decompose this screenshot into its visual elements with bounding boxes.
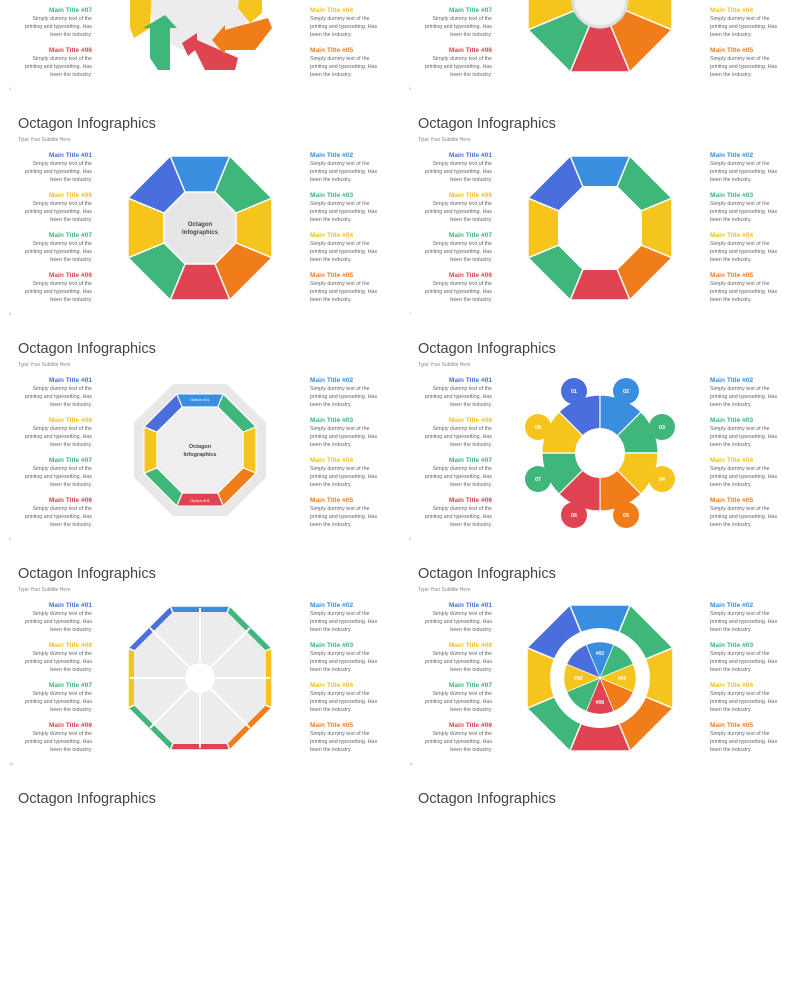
text: right column: Simply dummy text of the xyxy=(310,161,369,167)
text: left column: been the industry. xyxy=(450,667,492,673)
text: left column: Simply dummy text of the xyxy=(33,651,92,657)
subtitle: Type Your Subtitle Here xyxy=(18,587,71,593)
diagram: octagon pinwheel: Octagon xyxy=(188,222,212,228)
slide 10 xyxy=(9,566,377,766)
text: left column: printing and typesetting. Has xyxy=(425,434,492,440)
text: left column: Simply dummy text of the xyxy=(33,386,92,392)
text: right column: Simply dummy text of the xyxy=(710,16,769,22)
text: right column: Main Title #04 xyxy=(310,682,353,689)
text: right column: printing and typesetting. Has xyxy=(710,739,777,745)
slide 7: 7 xyxy=(409,311,411,316)
text: right column: Simply dummy text of the xyxy=(310,611,369,617)
title: Octagon Infographics xyxy=(418,341,556,357)
text: right column: Simply dummy text of the xyxy=(710,651,769,657)
text: right column: Simply dummy text of the xyxy=(710,241,769,247)
slide 10: 10 xyxy=(9,761,13,766)
text: left column: been the industry. xyxy=(450,627,492,633)
text: left column xyxy=(25,377,92,528)
slide 9 xyxy=(409,341,777,541)
subtitle: Type Your Subtitle Here xyxy=(18,362,71,368)
text: right column: printing and typesetting. Has xyxy=(310,289,377,295)
text: left column: been the industry. xyxy=(450,522,492,528)
text: right column: Main Title #03 xyxy=(310,192,353,199)
text: left column: been the industry. xyxy=(50,707,92,713)
text: right column: printing and typesetting. Has xyxy=(710,619,777,625)
text: right column: Simply dummy text of the xyxy=(310,201,369,207)
text: right column: printing and typesetting. Has xyxy=(710,659,777,665)
text: left column: printing and typesetting. Has xyxy=(425,289,492,295)
text: left column: Main Title #08 xyxy=(449,192,492,199)
text: right column: Main Title #02 xyxy=(710,602,753,609)
text: left column: been the industry. xyxy=(450,177,492,183)
text: right column: Main Title #02 xyxy=(710,152,753,159)
subtitle: Type Your Subtitle Here xyxy=(418,137,471,143)
text: right column: been the industry. xyxy=(710,747,752,753)
text: left column: Main Title #07 xyxy=(49,7,92,14)
text: right column: Simply dummy text of the xyxy=(710,201,769,207)
text: left column: printing and typesetting. Has xyxy=(425,699,492,705)
text: left column: been the industry. xyxy=(50,257,92,263)
text: right column: printing and typesetting. Has xyxy=(310,514,377,520)
text: right column: been the industry. xyxy=(710,297,752,303)
slide 4 (top-left, cropped) xyxy=(9,0,377,91)
slide 5 (top-right, cropped): 5 xyxy=(409,86,411,91)
text: right column xyxy=(710,7,777,78)
text: left column: Main Title #06 xyxy=(449,47,492,54)
text: right column: Simply dummy text of the xyxy=(310,241,369,247)
text: left column xyxy=(425,602,492,753)
diagram: octagon pinwheel xyxy=(128,156,272,300)
text: right column: printing and typesetting. Has xyxy=(310,249,377,255)
text: right column: Main Title #02 xyxy=(710,377,753,384)
diagram: petals: 06 xyxy=(571,513,577,519)
text: left column: printing and typesetting. Has xyxy=(425,209,492,215)
text: left column: printing and typesetting. Has xyxy=(425,619,492,625)
title: Octagon Infographics xyxy=(418,116,556,132)
text: left column: printing and typesetting. Has xyxy=(25,619,92,625)
text: right column: been the industry. xyxy=(710,522,752,528)
slide 8: 8 xyxy=(9,536,11,541)
text: left column: printing and typesetting. Has xyxy=(25,289,92,295)
text: right column: printing and typesetting. Has xyxy=(710,24,777,30)
text: left column: Simply dummy text of the xyxy=(33,201,92,207)
text: right column: been the industry. xyxy=(310,482,352,488)
diagram: petals: 08 xyxy=(535,425,541,431)
text: left column: Main Title #08 xyxy=(49,642,92,649)
text: right column: Simply dummy text of the xyxy=(710,161,769,167)
text: right column xyxy=(310,377,377,528)
text: right column: Simply dummy text of the xyxy=(310,56,369,62)
text: left column: Simply dummy text of the xyxy=(433,56,492,62)
diagram: petals xyxy=(525,378,675,528)
text: right column: Simply dummy text of the xyxy=(710,691,769,697)
text: left column: Simply dummy text of the xyxy=(433,16,492,22)
text: left column: been the industry. xyxy=(450,707,492,713)
text: left column: Simply dummy text of the xyxy=(33,731,92,737)
text: left column: been the industry. xyxy=(50,522,92,528)
text: left column: printing and typesetting. Has xyxy=(425,514,492,520)
text: left column: Main Title #07 xyxy=(449,7,492,14)
text: right column xyxy=(310,602,377,753)
text: right column: been the industry. xyxy=(710,707,752,713)
text: left column: printing and typesetting. Has xyxy=(25,249,92,255)
text: left column: been the industry. xyxy=(50,177,92,183)
diagram: option octagon: Option #01 xyxy=(190,498,211,503)
text: left column: been the industry. xyxy=(450,402,492,408)
text: right column: Main Title #03 xyxy=(710,192,753,199)
text: left column: printing and typesetting. Has xyxy=(425,249,492,255)
text: left column: been the industry. xyxy=(50,217,92,223)
subtitle: Type Your Subtitle Here xyxy=(418,362,471,368)
text: right column: been the industry. xyxy=(310,747,352,753)
diagram: octagon pinwheel: Infographics xyxy=(182,230,219,236)
text: left column: printing and typesetting. Has xyxy=(25,434,92,440)
text: left column xyxy=(425,377,492,528)
text: left column: been the industry. xyxy=(50,32,92,38)
text: left column: Simply dummy text of the xyxy=(33,691,92,697)
text: right column: Main Title #05 xyxy=(710,722,753,729)
text: right column: Simply dummy text of the xyxy=(710,281,769,287)
text: left column xyxy=(425,152,492,303)
slide 8 xyxy=(9,341,377,541)
text: right column: printing and typesetting. Has xyxy=(310,434,377,440)
text: left column: Main Title #01 xyxy=(449,602,492,609)
text: right column: printing and typesetting. Has xyxy=(310,739,377,745)
text: right column: Main Title #02 xyxy=(310,602,353,609)
diagram: petals: 04 xyxy=(659,477,666,483)
text: left column: printing and typesetting. Has xyxy=(25,169,92,175)
text: left column: been the industry. xyxy=(50,402,92,408)
diagram: option octagon: Option #01 xyxy=(190,397,211,402)
diagram: octagon ring with pie: #04 xyxy=(618,676,626,682)
text: right column: Main Title #04 xyxy=(710,232,753,239)
text: left column: printing and typesetting. Has xyxy=(25,474,92,480)
text: left column: Simply dummy text of the xyxy=(433,651,492,657)
text: left column: been the industry. xyxy=(50,747,92,753)
text: right column: printing and typesetting. Has xyxy=(710,289,777,295)
text: right column: Main Title #03 xyxy=(710,417,753,424)
text: right column: Simply dummy text of the xyxy=(710,731,769,737)
text: right column: printing and typesetting. Has xyxy=(710,699,777,705)
text: right column: printing and typesetting. Has xyxy=(710,209,777,215)
diagram: petals: 05 xyxy=(623,513,629,519)
text: right column: been the industry. xyxy=(710,217,752,223)
text: left column xyxy=(425,7,492,78)
slide 7 xyxy=(409,116,777,316)
text: right column: Main Title #02 xyxy=(310,377,353,384)
text: left column: Main Title #08 xyxy=(49,417,92,424)
text: right column: printing and typesetting. Has xyxy=(310,64,377,70)
text: right column: Simply dummy text of the xyxy=(310,281,369,287)
text: left column: Simply dummy text of the xyxy=(33,241,92,247)
text: left column: been the industry. xyxy=(50,442,92,448)
diagram: octagon ring with pie xyxy=(528,606,672,750)
text: right column: been the industry. xyxy=(710,667,752,673)
text: right column: Simply dummy text of the xyxy=(310,386,369,392)
diagram: option octagon: Infographics xyxy=(183,452,217,458)
text: right column: been the industry. xyxy=(310,177,352,183)
diagram: octagon ring with pie: #02 xyxy=(596,651,604,657)
text: left column: Main Title #06 xyxy=(449,497,492,504)
text: right column: been the industry. xyxy=(310,257,352,263)
text: right column: Main Title #04 xyxy=(310,232,353,239)
text: right column: Main Title #05 xyxy=(710,497,753,504)
text: left column: been the industry. xyxy=(50,627,92,633)
text: right column: printing and typesetting. Has xyxy=(710,249,777,255)
text: left column: printing and typesetting. Has xyxy=(25,699,92,705)
text: right column xyxy=(310,152,377,303)
text: left column: printing and typesetting. Has xyxy=(25,659,92,665)
diagram: option octagon: Octagon xyxy=(189,444,212,450)
text: left column: printing and typesetting. Has xyxy=(425,24,492,30)
text: right column: Main Title #05 xyxy=(710,272,753,279)
text: left column: Main Title #08 xyxy=(449,417,492,424)
diagram: petals: 01 xyxy=(571,389,577,395)
text: right column: printing and typesetting. Has xyxy=(710,474,777,480)
text: right column: Main Title #02 xyxy=(310,152,353,159)
text: right column: printing and typesetting. Has xyxy=(310,209,377,215)
text: left column: Simply dummy text of the xyxy=(433,161,492,167)
text: right column: Main Title #05 xyxy=(710,47,753,54)
text: right column: Main Title #04 xyxy=(310,457,353,464)
text: left column: been the industry. xyxy=(50,667,92,673)
title: Octagon Infographics xyxy=(418,566,556,582)
text: left column xyxy=(25,152,92,303)
text: left column: Main Title #07 xyxy=(49,682,92,689)
text: left column xyxy=(25,602,92,753)
text: right column: been the industry. xyxy=(310,402,352,408)
text: right column: printing and typesetting. Has xyxy=(710,394,777,400)
text: right column: been the industry. xyxy=(310,522,352,528)
text: left column: Main Title #06 xyxy=(49,497,92,504)
diagram: option octagon xyxy=(134,384,266,516)
text: left column: printing and typesetting. Has xyxy=(25,514,92,520)
text: left column: Simply dummy text of the xyxy=(433,611,492,617)
slide 11 xyxy=(409,566,777,766)
text: right column: printing and typesetting. Has xyxy=(710,434,777,440)
text: right column: Main Title #04 xyxy=(310,7,353,14)
text: right column: been the industry. xyxy=(310,32,352,38)
diagram: petals: 02 xyxy=(623,389,629,395)
diagram: petals: 07 xyxy=(535,477,541,483)
text: right column xyxy=(310,7,377,78)
text: left column: Main Title #08 xyxy=(49,192,92,199)
text: right column: printing and typesetting. Has xyxy=(310,659,377,665)
text: right column: been the industry. xyxy=(310,707,352,713)
diagram: octagon ring with pie: #08 xyxy=(574,676,582,682)
diagram: grey segments with colored rims xyxy=(128,606,272,750)
text: right column: been the industry. xyxy=(710,32,752,38)
title: Octagon Infographics xyxy=(18,566,156,582)
text: left column: printing and typesetting. Has xyxy=(425,394,492,400)
text: right column xyxy=(710,152,777,303)
slide 6 xyxy=(9,116,377,316)
text: left column: printing and typesetting. Has xyxy=(425,739,492,745)
text: right column: Simply dummy text of the xyxy=(310,691,369,697)
text: right column: Simply dummy text of the xyxy=(310,16,369,22)
text: left column xyxy=(25,7,92,78)
text: right column: Simply dummy text of the xyxy=(710,56,769,62)
text: right column: been the industry. xyxy=(710,442,752,448)
text: left column: Simply dummy text of the xyxy=(33,56,92,62)
text: right column: been the industry. xyxy=(710,482,752,488)
slide 11: 11 xyxy=(409,761,413,766)
text: left column: printing and typesetting. Has xyxy=(25,64,92,70)
text: left column: printing and typesetting. Has xyxy=(425,659,492,665)
text: left column: Main Title #07 xyxy=(49,457,92,464)
text: left column: Simply dummy text of the xyxy=(33,611,92,617)
text: left column: Simply dummy text of the xyxy=(433,281,492,287)
text: right column: printing and typesetting. Has xyxy=(710,514,777,520)
text: left column: Simply dummy text of the xyxy=(33,16,92,22)
text: right column: Simply dummy text of the xyxy=(710,426,769,432)
title: Octagon Infographics xyxy=(18,116,156,132)
text: left column: printing and typesetting. Has xyxy=(425,169,492,175)
text: left column: Main Title #06 xyxy=(49,272,92,279)
text: left column: Main Title #06 xyxy=(49,47,92,54)
diagram: petals: 03 xyxy=(659,425,665,431)
text: right column: Simply dummy text of the xyxy=(310,651,369,657)
text: right column: Main Title #04 xyxy=(710,682,753,689)
text: right column: Main Title #03 xyxy=(310,642,353,649)
text: right column: printing and typesetting. Has xyxy=(310,474,377,480)
text: right column: printing and typesetting. Has xyxy=(310,394,377,400)
text: left column: been the industry. xyxy=(450,297,492,303)
diagram: octagon ring with pie: #06 xyxy=(596,700,604,706)
text: left column: Simply dummy text of the xyxy=(433,426,492,432)
text: right column: Main Title #03 xyxy=(710,642,753,649)
text: left column: Simply dummy text of the xyxy=(33,506,92,512)
text: left column: Main Title #01 xyxy=(449,377,492,384)
text: right column: Main Title #04 xyxy=(710,457,753,464)
text: right column: Main Title #05 xyxy=(310,722,353,729)
text: right column: Simply dummy text of the xyxy=(710,506,769,512)
text: right column: Simply dummy text of the xyxy=(310,466,369,472)
text: left column: Simply dummy text of the xyxy=(433,506,492,512)
text: left column: Simply dummy text of the xyxy=(433,691,492,697)
text: left column: Main Title #01 xyxy=(449,152,492,159)
subtitle: Type Your Subtitle Here xyxy=(418,587,471,593)
text: left column: Simply dummy text of the xyxy=(433,466,492,472)
text: right column: been the industry. xyxy=(310,72,352,78)
slide 9: 9 xyxy=(409,536,411,541)
text: left column: been the industry. xyxy=(450,442,492,448)
text: right column: been the industry. xyxy=(310,442,352,448)
text: right column xyxy=(710,377,777,528)
text: right column: Main Title #04 xyxy=(710,7,753,14)
text: right column: Main Title #03 xyxy=(310,417,353,424)
text: left column: been the industry. xyxy=(450,217,492,223)
text: left column: printing and typesetting. Has xyxy=(425,474,492,480)
text: right column: been the industry. xyxy=(310,297,352,303)
text: right column: Simply dummy text of the xyxy=(310,506,369,512)
text: right column: printing and typesetting. Has xyxy=(310,169,377,175)
text: left column: printing and typesetting. Has xyxy=(25,24,92,30)
text: left column: Simply dummy text of the xyxy=(33,161,92,167)
text: right column: Simply dummy text of the xyxy=(710,386,769,392)
text: left column: been the industry. xyxy=(450,482,492,488)
text: right column: Main Title #05 xyxy=(310,497,353,504)
text: left column: been the industry. xyxy=(450,32,492,38)
text: left column: printing and typesetting. Has xyxy=(25,394,92,400)
text: right column: printing and typesetting. Has xyxy=(310,619,377,625)
text: left column: been the industry. xyxy=(50,297,92,303)
text: left column: Main Title #06 xyxy=(449,722,492,729)
title: Octagon Infographics xyxy=(18,341,156,357)
title: Octagon Infographics xyxy=(418,791,556,807)
text: right column: been the industry. xyxy=(710,257,752,263)
subtitle: Type Your Subtitle Here xyxy=(18,137,71,143)
diagram: octagon ring xyxy=(528,156,672,300)
text: left column: Main Title #07 xyxy=(449,457,492,464)
text: left column: Simply dummy text of the xyxy=(433,241,492,247)
text: left column: Main Title #07 xyxy=(449,682,492,689)
text: left column: been the industry. xyxy=(450,257,492,263)
slide 4 (top-left, cropped): 4 xyxy=(9,86,11,91)
text: right column: Main Title #05 xyxy=(310,47,353,54)
text: left column: Main Title #06 xyxy=(49,722,92,729)
text: left column: printing and typesetting. Has xyxy=(425,64,492,70)
text: right column: printing and typesetting. Has xyxy=(710,64,777,70)
text: right column: Main Title #05 xyxy=(310,272,353,279)
text: right column: been the industry. xyxy=(710,177,752,183)
slide 5 (top-right, cropped) xyxy=(409,0,777,91)
text: right column: Simply dummy text of the xyxy=(310,731,369,737)
text: right column: been the industry. xyxy=(310,667,352,673)
text: left column: Simply dummy text of the xyxy=(33,281,92,287)
text: right column: been the industry. xyxy=(310,627,352,633)
text: right column: printing and typesetting. Has xyxy=(310,699,377,705)
text: left column: Simply dummy text of the xyxy=(33,466,92,472)
text: left column: Main Title #01 xyxy=(49,602,92,609)
text: left column: Main Title #06 xyxy=(449,272,492,279)
text: left column: Main Title #01 xyxy=(49,152,92,159)
text: left column: Main Title #07 xyxy=(49,232,92,239)
text: right column xyxy=(710,602,777,753)
text: left column: Simply dummy text of the xyxy=(433,731,492,737)
text: left column: been the industry. xyxy=(450,747,492,753)
title: Octagon Infographics xyxy=(18,791,156,807)
text: left column: been the industry. xyxy=(50,482,92,488)
slide 6: 6 xyxy=(9,311,11,316)
text: right column: printing and typesetting. Has xyxy=(310,24,377,30)
text: right column: printing and typesetting. Has xyxy=(710,169,777,175)
text: left column: Simply dummy text of the xyxy=(33,426,92,432)
text: left column: Simply dummy text of the xyxy=(433,386,492,392)
text: left column: Main Title #07 xyxy=(449,232,492,239)
diagram: arrow pinwheel xyxy=(130,0,272,70)
text: left column: been the industry. xyxy=(50,72,92,78)
text: right column: Simply dummy text of the xyxy=(710,466,769,472)
text: right column: Simply dummy text of the xyxy=(710,611,769,617)
text: right column: been the industry. xyxy=(710,402,752,408)
text: left column: Simply dummy text of the xyxy=(433,201,492,207)
text: right column: been the industry. xyxy=(710,72,752,78)
diagram: octagon wheel xyxy=(528,0,672,72)
text: left column: printing and typesetting. Has xyxy=(25,739,92,745)
text: left column: printing and typesetting. Has xyxy=(25,209,92,215)
text: right column: been the industry. xyxy=(310,217,352,223)
text: left column: Main Title #08 xyxy=(449,642,492,649)
text: right column: been the industry. xyxy=(710,627,752,633)
text: left column: been the industry. xyxy=(450,72,492,78)
text: left column: Main Title #01 xyxy=(49,377,92,384)
text: right column: Simply dummy text of the xyxy=(310,426,369,432)
